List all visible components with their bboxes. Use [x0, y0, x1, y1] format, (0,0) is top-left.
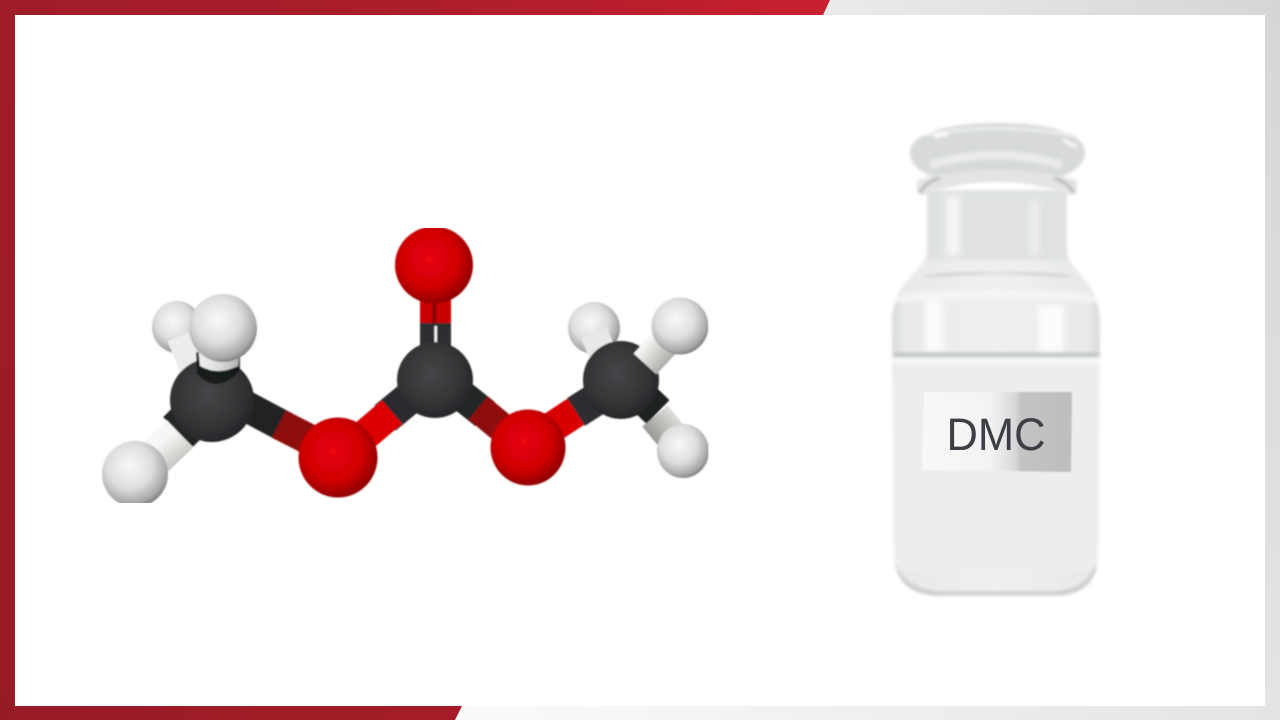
- atom: right oxygen: [490, 410, 566, 486]
- atom: left methyl carbon: [170, 358, 254, 442]
- bond: right carbon stubs: [636, 388, 670, 424]
- bottle body: [892, 190, 1100, 596]
- hydrogen: right upper: [652, 298, 708, 354]
- bottle stopper: [910, 123, 1085, 178]
- bond: carbon to left oxygen: [356, 386, 418, 447]
- atom: central carbon: [397, 342, 473, 418]
- bond: lower-left carbon stub: [178, 410, 200, 432]
- hydrogen: right back: [568, 302, 620, 354]
- atom: right methyl carbon: [583, 341, 659, 419]
- bond: right oxygen to methyl: [544, 386, 604, 439]
- hydrogen: lower left: [102, 441, 168, 507]
- bond: right upper hydrogen: [645, 326, 680, 364]
- bond: carbon to right oxygen: [456, 384, 510, 440]
- bond: left methyl to oxygen: [246, 392, 316, 452]
- bottle: glass reagent jar labelled DMC: [892, 123, 1100, 596]
- atom: left oxygen: [298, 418, 378, 498]
- hydrogen: left back: [152, 300, 196, 353]
- bond: carbonyl double bond: [420, 295, 451, 351]
- bond: front left hydrogen: [195, 351, 241, 384]
- bond: right lower hydrogen: [655, 416, 683, 450]
- bottle collar: [917, 170, 1077, 195]
- label text: DMC: [946, 409, 1046, 460]
- atom: top oxygen: [395, 226, 473, 304]
- bond: right back hydrogen: [594, 333, 612, 376]
- bottle label: [922, 392, 1072, 472]
- bond: lower-left hydrogen: [140, 434, 180, 472]
- molecule: ball-and-stick model of dimethyl carbonate: [102, 226, 709, 507]
- hydrogen: right lower: [657, 424, 709, 478]
- bond: left back hydrogen: [180, 336, 200, 385]
- hydrogen: left front: [189, 294, 257, 362]
